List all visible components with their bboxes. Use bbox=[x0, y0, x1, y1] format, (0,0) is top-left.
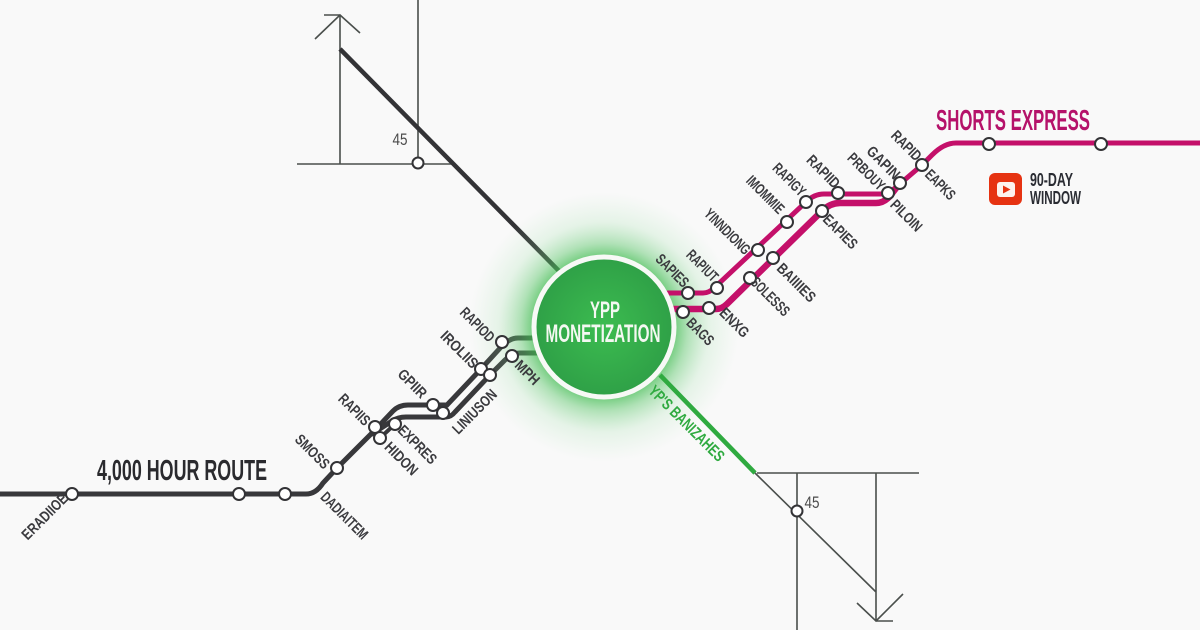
station labels: pink route: YINNDIONG bbox=[700, 205, 754, 259]
station labels: pink route: GAPIN bbox=[863, 143, 903, 183]
station labels: pink route: RAPIID bbox=[803, 152, 843, 192]
pink Shorts Express lines bbox=[668, 143, 1200, 309]
callout: 90-day window bbox=[989, 170, 1081, 208]
station labels: dark route bbox=[18, 304, 543, 544]
heading: Shorts Express: SHORTS EXPRESS bbox=[936, 105, 1090, 137]
station labels: pink route: BAIIIIES bbox=[773, 260, 819, 306]
green branch label: YP'S BANIZAHES bbox=[645, 383, 728, 466]
bottom thin construction lines with arrow bbox=[755, 473, 919, 630]
station labels: dark route: LINIUSON bbox=[449, 386, 501, 438]
station labels: dark route: MPH bbox=[511, 357, 543, 389]
icon: video play bbox=[989, 173, 1022, 205]
station labels: pink route: IMOMMIE bbox=[742, 172, 788, 218]
station labels: dark route: IROLIIS bbox=[437, 328, 481, 372]
station labels: pink route: PILOIN bbox=[887, 197, 925, 235]
stations: dark route bbox=[66, 336, 518, 500]
station labels: pink route: EAPIES bbox=[819, 211, 861, 253]
station labels: dark route: EXPRES bbox=[394, 422, 440, 468]
station labels: dark route: ERADIIOE bbox=[18, 490, 72, 544]
station labels: dark route: HIDON bbox=[381, 439, 421, 479]
station labels: dark route: GPIIR bbox=[394, 366, 430, 402]
station labels: dark route: RAPIIS bbox=[335, 391, 373, 429]
hub: YPP Monetization bbox=[534, 257, 674, 397]
dark 4,000 hour route lines bbox=[0, 338, 540, 494]
station: top junction bbox=[412, 158, 424, 168]
station labels: pink route: ENXG bbox=[716, 305, 752, 341]
dark diagonal line to hub bbox=[340, 49, 560, 272]
station labels: pink route: SOLESSS bbox=[747, 274, 793, 320]
callout text: WINDOW bbox=[1030, 188, 1081, 208]
station labels: pink route: BAGS bbox=[683, 315, 717, 349]
callout text: 90-DAY bbox=[1030, 170, 1073, 190]
label: 45 top: 45 bbox=[392, 130, 408, 149]
hub title: MONETIZATION bbox=[546, 320, 660, 348]
top thin construction lines with arrow bbox=[297, 0, 452, 168]
hub title: YPP bbox=[590, 297, 620, 324]
station labels: pink route: EAPKS bbox=[921, 166, 959, 204]
station: bottom junction bbox=[792, 506, 802, 516]
station labels: dark route: RAPIOD bbox=[456, 304, 498, 346]
station labels: pink route: RAPID bbox=[887, 127, 925, 165]
station labels: dark route: DADIAITEM bbox=[317, 489, 371, 543]
station labels: dark route: SMOSS bbox=[291, 431, 333, 473]
label: 45 bottom: 45 bbox=[804, 493, 820, 512]
green glow around hub bbox=[469, 192, 739, 462]
station labels: pink route: RAPIGY bbox=[769, 160, 809, 200]
heading: 4,000 Hour Route: 4,000 HOUR ROUTE bbox=[97, 455, 267, 487]
station labels: pink route bbox=[652, 127, 959, 349]
station labels: pink route: SAPIES bbox=[652, 251, 692, 291]
green branch line bbox=[660, 375, 755, 473]
station labels: pink route: RAPIUT bbox=[683, 247, 721, 285]
station labels: pink route: PRBOUY bbox=[844, 150, 888, 194]
stations: pink route bbox=[677, 138, 1107, 318]
